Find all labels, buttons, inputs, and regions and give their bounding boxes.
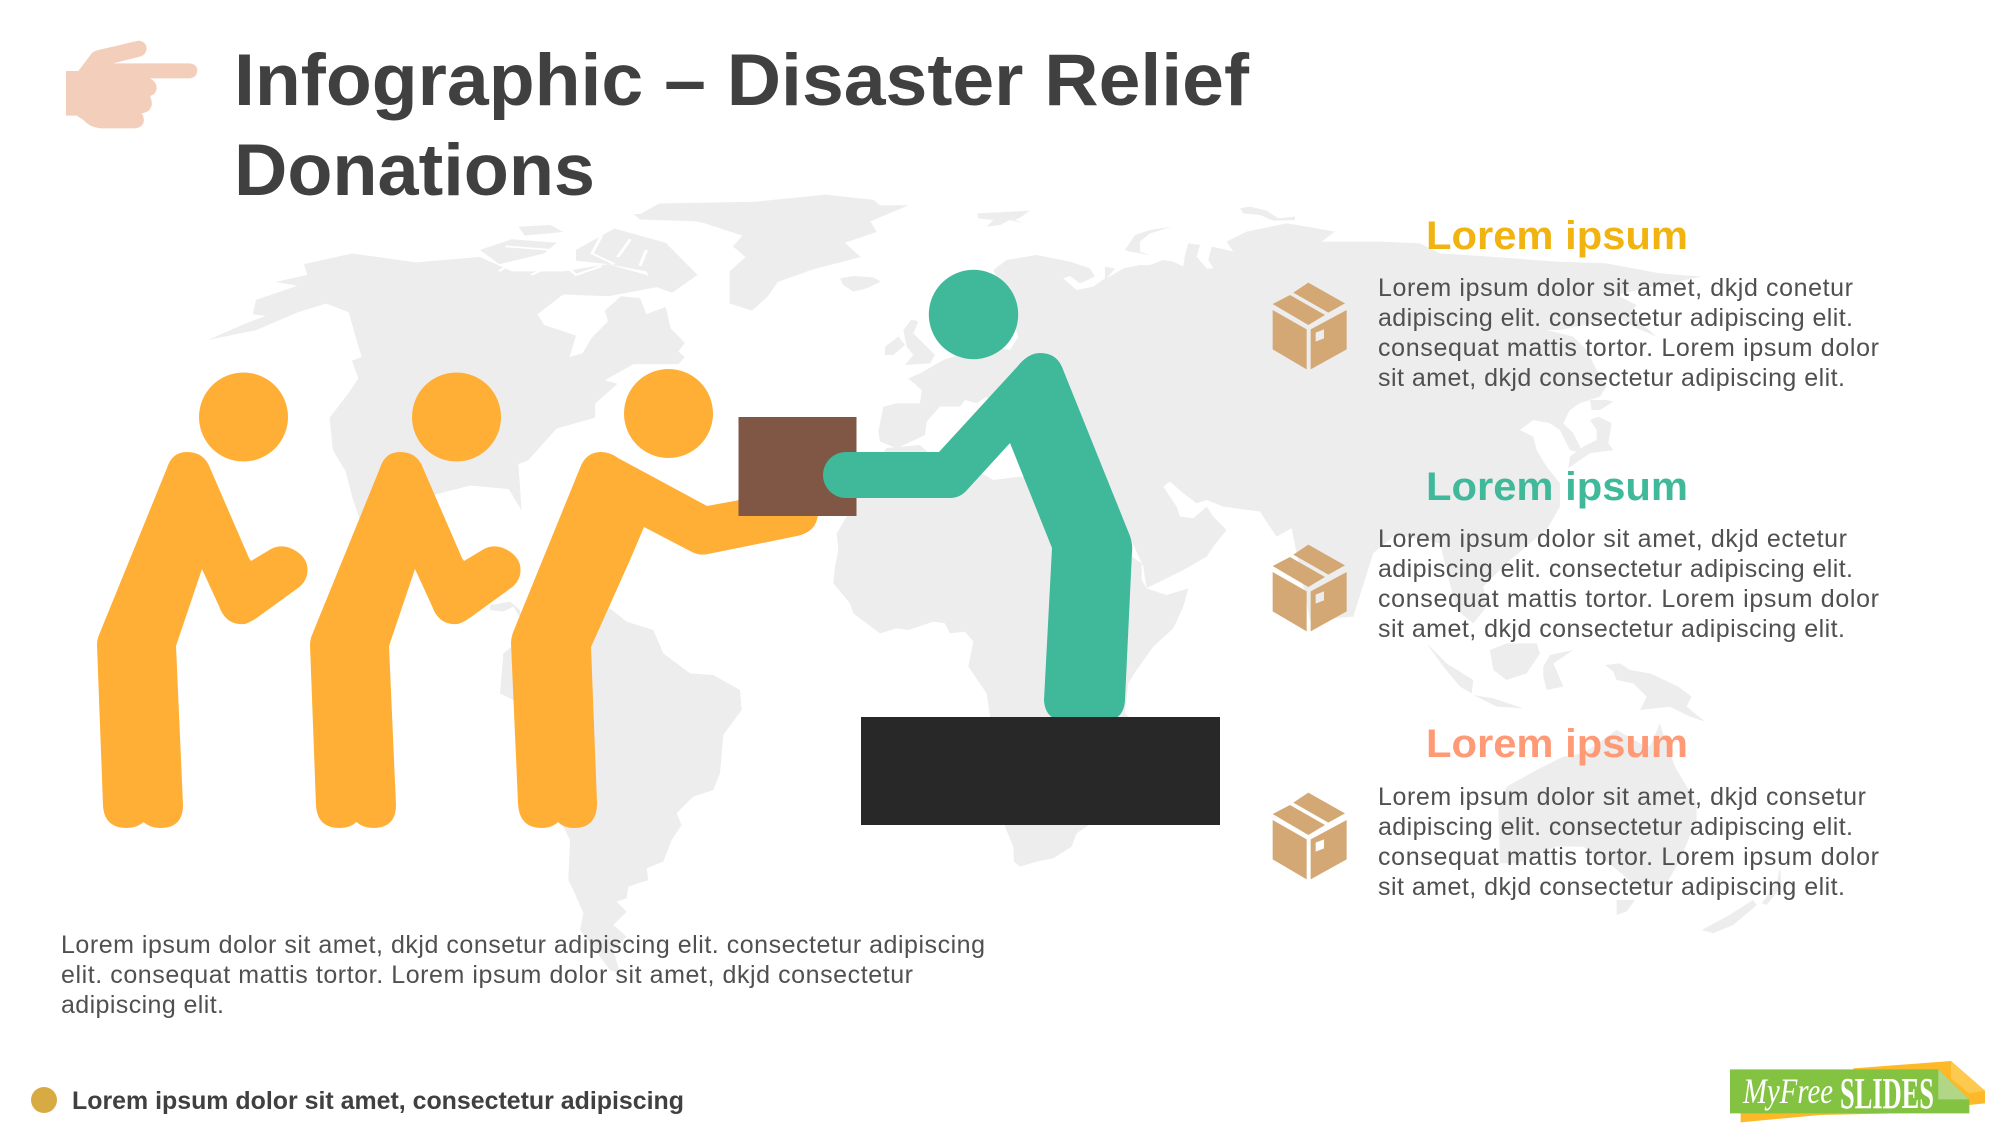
panel: item two [1273,465,1879,643]
panel: item three [1273,722,1879,901]
title: Donations [234,130,595,211]
icon: pointing hand [66,41,197,128]
text: item one: sit amet, dkjd consectetur adipiscing elit. [1378,364,1845,392]
figure: orange person two [310,372,521,828]
text: item two: adipiscing elit. consectetur adipiscing elit. [1378,555,1853,583]
heading: item three: Lorem ipsum [1426,722,1688,766]
title: Infographic – Disaster Relief [234,40,1250,121]
text: item one: consequat mattis tortor. Lorem ipsum dolor [1378,334,1879,362]
text: item one: Lorem ipsum dolor sit amet, dkjd conetur [1378,274,1853,302]
heading: item two: Lorem ipsum [1426,465,1688,509]
text: item three: consequat mattis tortor. Lorem ipsum dolor [1378,843,1879,871]
icon: parcel two [1273,545,1347,631]
footer bullet [31,1087,57,1113]
text: item three: adipiscing elit. consectetur adipiscing elit. [1378,813,1853,841]
text: item two [1378,525,1879,643]
text: item two: consequat mattis tortor. Lorem ipsum dolor [1378,585,1879,613]
text: item two: Lorem ipsum dolor sit amet, dkjd ectetur [1378,525,1847,553]
donation box [738,417,856,516]
text: item three [1378,783,1879,901]
title [234,40,1250,211]
logo: MyFree Slides: MyFree [1742,1071,1833,1111]
logo: MyFree Slides: SLIDES [1840,1069,1934,1118]
text block: left paragraph: Lorem ipsum dolor sit amet, dkjd consetur adipiscing elit. consectetur adipiscing [61,931,985,959]
panel: item one [1273,214,1879,392]
text: item three: sit amet, dkjd consectetur adipiscing elit. [1378,873,1845,901]
footer text: Lorem ipsum dolor sit amet, consectetur adipiscing [72,1087,684,1115]
heading: item one: Lorem ipsum [1426,214,1688,258]
figure: orange person three handing the box [511,369,818,828]
text block: left paragraph: elit. consequat mattis tortor. Lorem ipsum dolor sit amet, dkjd consectetur [61,961,913,989]
text block: left paragraph [61,931,985,1019]
logo: MyFree Slides [1730,1061,1985,1122]
figure: green person [823,270,1132,722]
text: item one: adipiscing elit. consectetur adipiscing elit. [1378,304,1853,332]
black platform [861,717,1220,825]
icon: parcel one [1273,283,1347,369]
text: item one [1378,274,1879,392]
text: item two: sit amet, dkjd consectetur adipiscing elit. [1378,615,1845,643]
world map background [208,195,1782,973]
text block: left paragraph: adipiscing elit. [61,991,224,1019]
icon: parcel three [1273,793,1347,879]
text: item three: Lorem ipsum dolor sit amet, dkjd consetur [1378,783,1866,811]
figure: orange person one [97,372,308,828]
